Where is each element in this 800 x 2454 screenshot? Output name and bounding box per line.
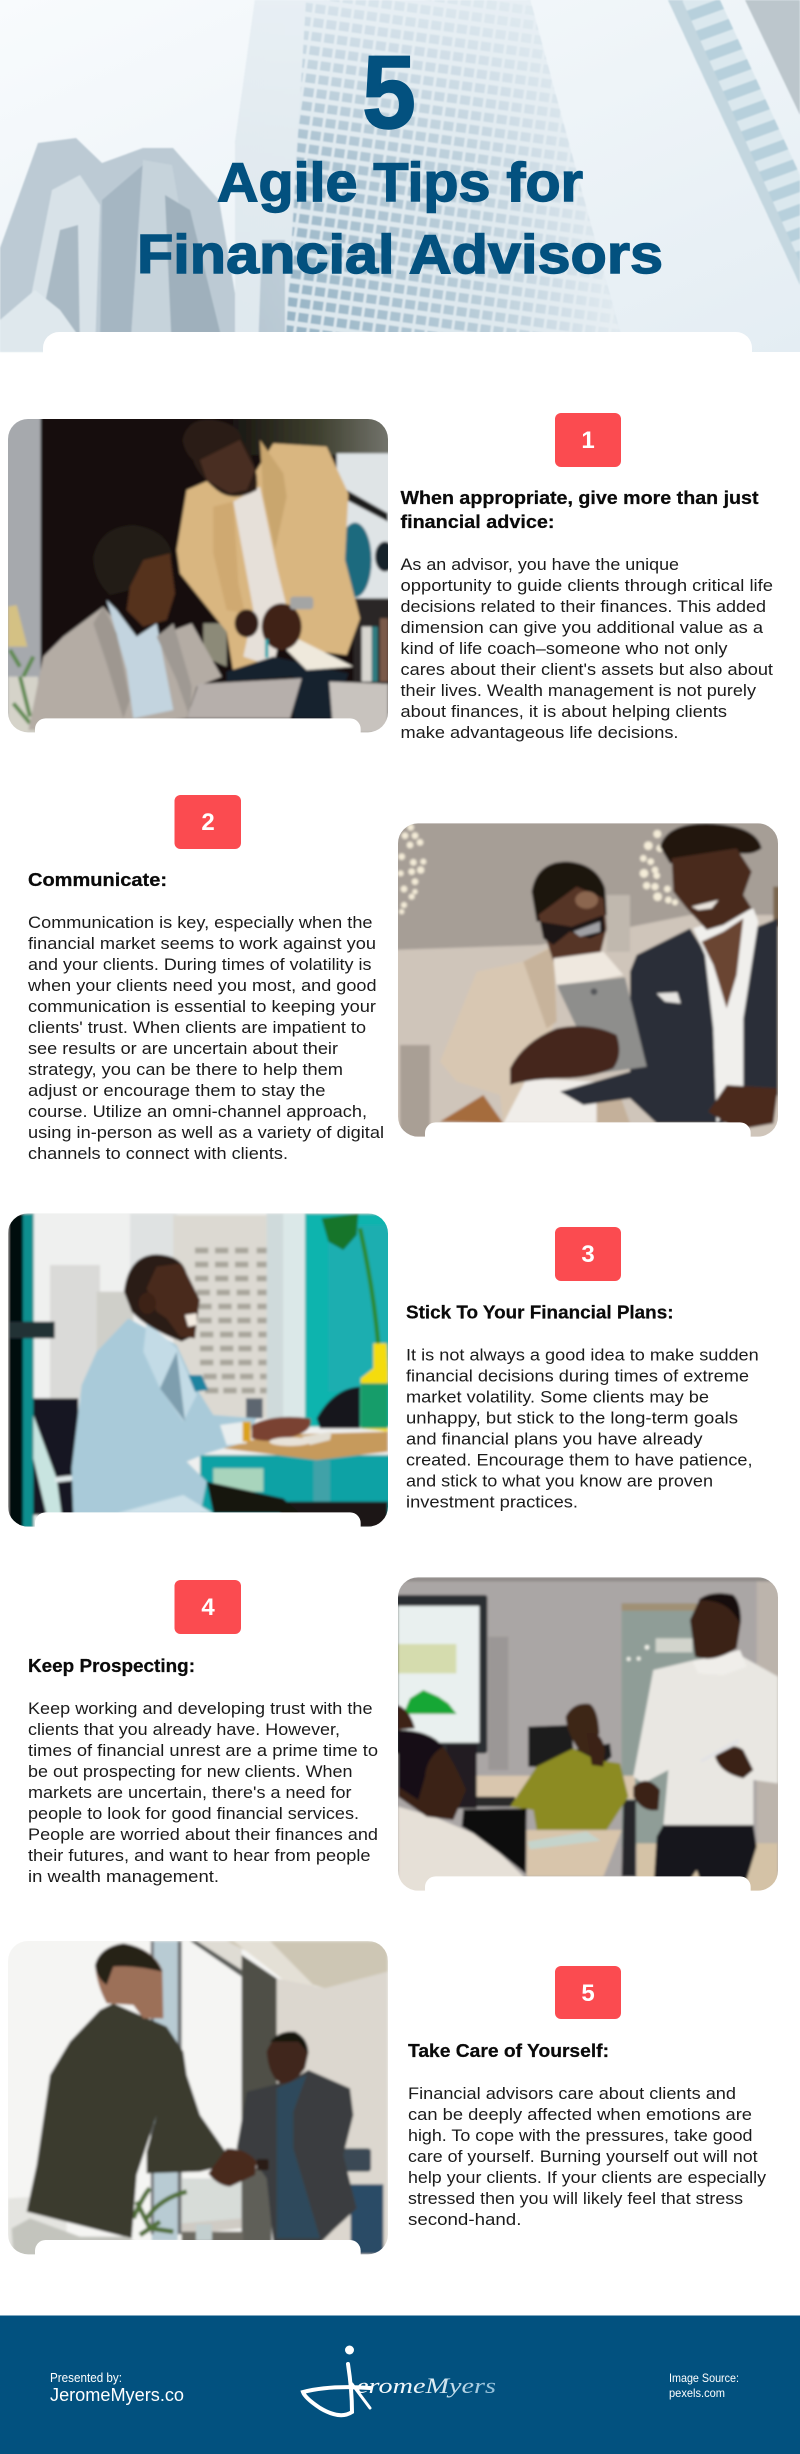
body text 1: As an advisor, you have the unique	[400, 556, 679, 574]
body text 2: when your clients need you most, and good	[27, 977, 376, 995]
image source credit: Image Source:	[669, 2371, 739, 2385]
table	[475, 1776, 635, 1799]
title: Financial Advisors	[137, 223, 663, 285]
body text 2: Communication is key, especially when the	[28, 914, 372, 932]
image tab	[35, 1512, 361, 1552]
foreground person	[398, 1807, 523, 1893]
body text 4: be out prospecting for new clients. When	[28, 1763, 352, 1781]
title	[137, 35, 663, 285]
chair left	[447, 1745, 477, 1808]
seated man	[28, 607, 222, 730]
tan jacket	[177, 443, 360, 672]
body text 4: markets are uncertain, there's a need for	[28, 1784, 352, 1802]
number badge 2	[174, 795, 241, 849]
presenter credit	[50, 2370, 184, 2405]
plant and glass	[133, 2188, 187, 2235]
body text 1: cares about their client's assets but also about	[400, 661, 773, 679]
screen	[390, 1595, 487, 1753]
head	[124, 1254, 198, 1342]
number badge 1: 1	[581, 427, 595, 454]
body text 1: about finances, it is about helping clients	[400, 703, 727, 721]
body text 2	[27, 914, 384, 1163]
body text 2: adjust or encourage them to stay the	[28, 1082, 326, 1100]
right man	[237, 2070, 357, 2243]
left man	[27, 2003, 230, 2238]
hero: skyscraper background	[0, 0, 800, 372]
number badge 3: 3	[581, 1241, 595, 1268]
body text 2: strategy, you can be there to help them	[28, 1061, 343, 1079]
seated man	[528, 1725, 612, 1770]
man suit	[72, 1318, 257, 1515]
door	[621, 1610, 700, 1844]
heading 1	[400, 487, 758, 532]
heading 5: Take Care of Yourself:	[408, 2040, 609, 2061]
photo: meeting room presentation	[398, 1577, 778, 1891]
body text 2: communication is essential to keeping your	[28, 998, 377, 1016]
panel: tip 2	[27, 795, 790, 1163]
logo	[303, 2346, 496, 2415]
white tab at hero bottom	[43, 332, 752, 372]
image tab	[35, 718, 361, 758]
presenter credit: Presented by:	[50, 2370, 122, 2385]
body text 4: people to look for good financial services.	[28, 1805, 359, 1823]
chair	[343, 2148, 371, 2172]
body text 4: People are worried about their finances and	[28, 1826, 378, 1844]
body text 3	[406, 1346, 759, 1512]
body text 1: kind of life coach–someone who not only	[400, 640, 728, 658]
number badge 5: 5	[581, 1980, 595, 2007]
tablet	[557, 977, 647, 1073]
logo: eromeMyers	[356, 2373, 496, 2398]
photo: two men shaking hands	[8, 1941, 388, 2254]
image source credit: pexels.com	[669, 2386, 725, 2400]
body text 3: and financial plans you have already	[406, 1430, 703, 1448]
body text 4	[28, 1700, 378, 1886]
body text 5: help your clients. If your clients are especially	[408, 2169, 767, 2187]
presenter	[633, 1653, 778, 1827]
body text 5: stressed then you will likely feel that stress	[408, 2190, 743, 2208]
panel: tip 3	[8, 1213, 758, 1527]
right man	[560, 918, 778, 1123]
heading 1: When appropriate, give more than just	[400, 487, 758, 508]
left man jacket	[443, 964, 550, 1116]
image source credit	[669, 2371, 739, 2400]
photo: two men with a tablet	[398, 823, 778, 1137]
body text 2: financial market seems to work against you	[28, 935, 376, 953]
footer	[0, 2316, 800, 2454]
heading 3: Stick To Your Financial Plans:	[406, 1302, 674, 1322]
heading 1: financial advice:	[400, 511, 554, 532]
laptop	[462, 1808, 527, 1874]
photo: two advisors at a laptop	[8, 419, 388, 732]
body text 5	[408, 2085, 767, 2229]
image tab	[425, 1876, 751, 1916]
body text 3: unhappy, but stick to the long-term goals	[406, 1410, 738, 1428]
title: Agile Tips for	[217, 151, 583, 213]
body text 4: clients that you already have. However,	[28, 1721, 340, 1739]
body text 4: Keep working and developing trust with the	[28, 1700, 372, 1718]
presenter credit: JeromeMyers.co	[50, 2385, 184, 2405]
heading 4: Keep Prospecting:	[28, 1655, 195, 1676]
body text 5: Financial advisors care about clients and	[408, 2085, 736, 2103]
body text 4: their futures, and want to hear from people	[28, 1847, 370, 1865]
body text 2: using in-person as well as a variety of digital	[28, 1124, 384, 1142]
body text 1: their lives. Wealth management is not purely	[400, 682, 757, 700]
body text 3: created. Encourage them to have patience,	[406, 1452, 752, 1470]
body text 2: clients' trust. When clients are impatient to	[28, 1019, 366, 1037]
panel: tip 1	[0, 410, 773, 758]
body text 1: make advantageous life decisions.	[400, 724, 678, 742]
body text 1: dimension can give you additional value as a	[400, 619, 764, 637]
body text 3: financial decisions during times of extreme	[406, 1368, 749, 1386]
number badge 2: 2	[201, 809, 215, 836]
body text 2: and your clients. During times of volatility is	[28, 956, 372, 974]
desk	[198, 1453, 388, 1516]
body text 2: course. Utilize an omni-channel approach,	[28, 1103, 367, 1121]
body text 1: opportunity to guide clients through critical life	[400, 577, 773, 595]
chair	[33, 1398, 78, 1515]
number badge 3	[555, 1227, 621, 1281]
body text 3: and stick to what you know are proven	[406, 1472, 713, 1490]
body text 4: times of financial unrest are a prime time to	[28, 1742, 378, 1760]
body text 4: in wealth management.	[28, 1868, 219, 1886]
body text 1: decisions related to their finances. This added	[400, 598, 766, 616]
panel: tip 4	[28, 1577, 778, 1891]
body text 5: care of yourself. Burning yourself out will not	[408, 2148, 758, 2166]
body text 1	[400, 556, 773, 742]
title: 5	[362, 35, 416, 151]
handshake	[208, 2148, 257, 2187]
image tab	[35, 2240, 361, 2280]
panel: tip 5	[8, 1941, 766, 2254]
heading 2: Communicate:	[28, 869, 167, 890]
body text 5: second-hand.	[408, 2211, 521, 2229]
body text 3: market volatility. Some clients may be	[406, 1388, 709, 1406]
body text 3: investment practices.	[406, 1494, 578, 1512]
plant and bottle	[360, 1228, 378, 1345]
number badge 4: 4	[201, 1594, 215, 1621]
image tab	[425, 1122, 751, 1162]
body text 3: It is not always a good idea to make sudden	[406, 1346, 759, 1364]
number badge 4	[174, 1580, 241, 1634]
number badge 5	[555, 1966, 621, 2019]
hands	[510, 1026, 619, 1085]
body text 2: channels to connect with clients.	[28, 1145, 288, 1163]
photo: smiling man at desk	[8, 1213, 388, 1527]
number badge 1	[555, 413, 621, 467]
body text 5: can be deeply affected when emotions are	[408, 2106, 752, 2124]
body text 5: high. To cope with the pressures, take good	[408, 2127, 752, 2145]
body text 2: see results or are uncertain about their	[28, 1040, 339, 1058]
